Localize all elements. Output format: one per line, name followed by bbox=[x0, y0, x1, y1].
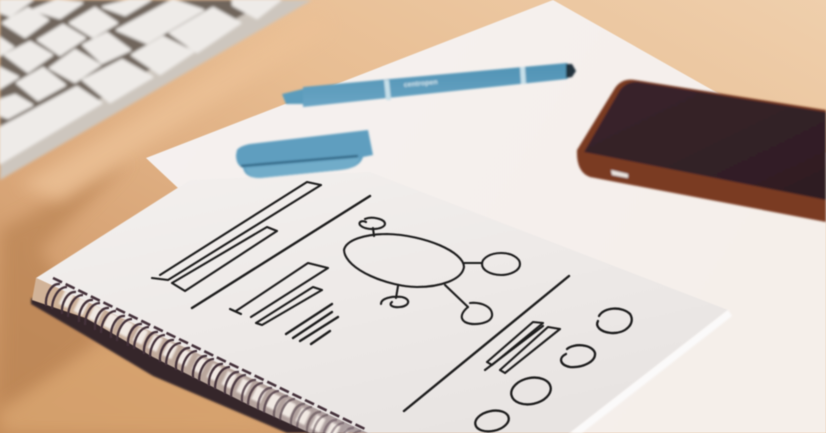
pen bbox=[282, 63, 576, 107]
spiral wire binding bbox=[46, 278, 367, 433]
hand-drawn infographic sketch bbox=[152, 182, 632, 433]
pen cap bbox=[236, 130, 373, 178]
notebook bbox=[31, 172, 732, 433]
bottom right node bbox=[445, 285, 468, 307]
page edge sheets bbox=[62, 297, 345, 433]
right node bbox=[464, 262, 482, 264]
cap clip bbox=[245, 158, 360, 178]
phone side button bbox=[611, 170, 628, 178]
keyboard bbox=[0, 0, 312, 180]
pen label: centropen bbox=[404, 79, 438, 89]
network diagram bbox=[344, 218, 520, 324]
page right edge highlight bbox=[570, 310, 732, 433]
pen bands bbox=[384, 80, 391, 100]
divider line right bbox=[404, 276, 569, 411]
cap clip line bbox=[241, 156, 358, 166]
keyboard base bbox=[0, 0, 312, 180]
pen tip bbox=[282, 89, 303, 104]
pen body bbox=[303, 63, 575, 107]
bar chart: middle group bbox=[230, 263, 338, 344]
phone bbox=[577, 80, 826, 222]
phone body bbox=[577, 80, 826, 222]
keyboard keys bbox=[0, 0, 280, 163]
list circles bbox=[473, 309, 632, 433]
pen end cap bbox=[566, 64, 576, 78]
bar chart: left group bbox=[152, 182, 321, 291]
bottom left node bbox=[381, 286, 408, 307]
axis line left bbox=[192, 196, 370, 308]
top node bbox=[359, 218, 385, 236]
phone screen bbox=[584, 82, 826, 200]
central node bbox=[344, 234, 464, 287]
bar chart: right group bbox=[485, 322, 560, 373]
notebook page edge band bbox=[32, 278, 372, 433]
notebook shadow bbox=[31, 298, 345, 433]
notebook page bbox=[36, 172, 728, 433]
